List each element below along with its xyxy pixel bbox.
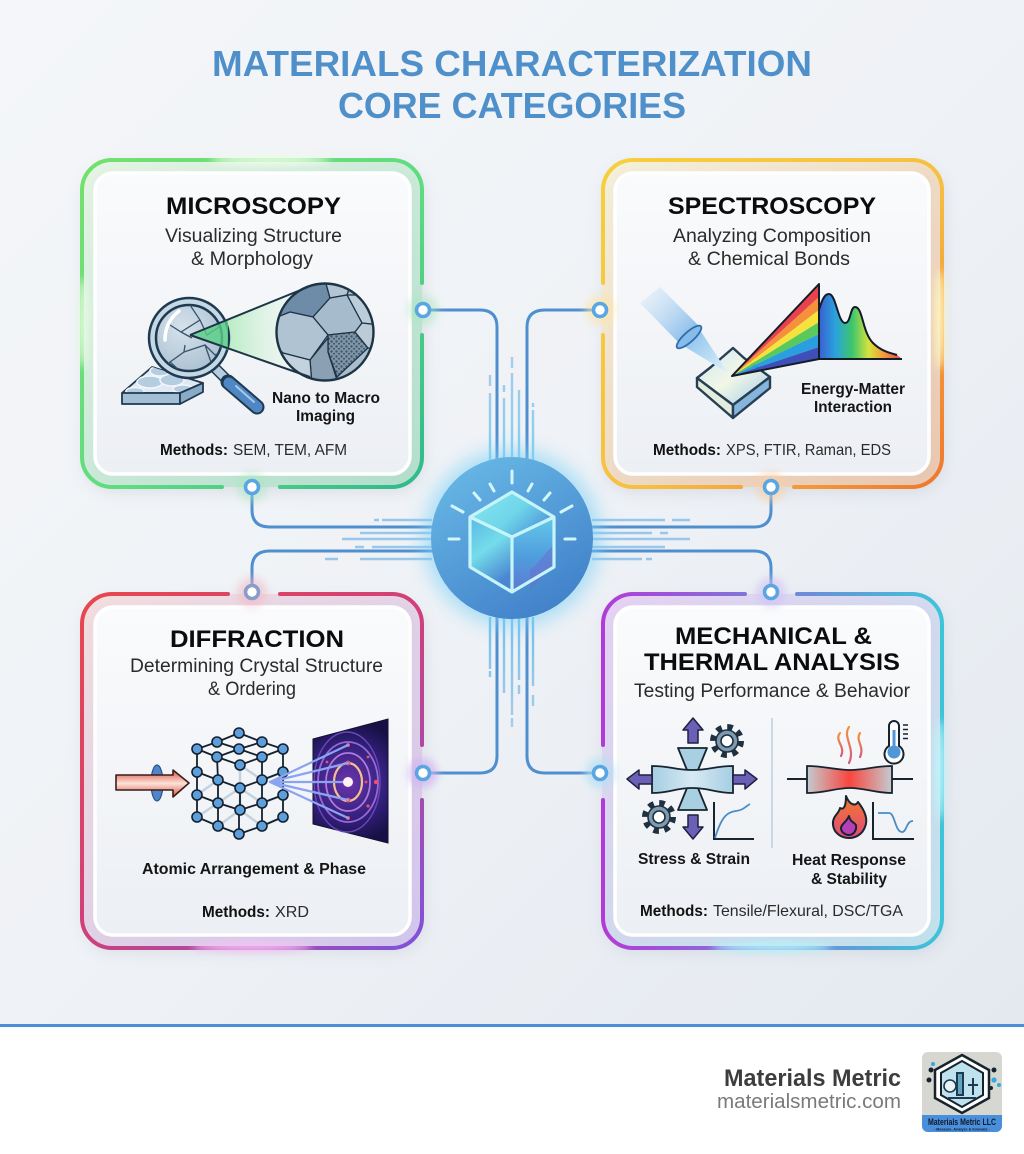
label: heat response and stability (792, 852, 906, 888)
divider (771, 718, 773, 848)
panel: diffraction (82, 594, 422, 952)
icon: gear top (714, 728, 740, 754)
chart: stress strain curve (714, 802, 754, 839)
chart: thermal curve (873, 802, 914, 839)
label: energy-matter interaction: Interaction (814, 399, 892, 416)
spectroscopy methods: Methods: (653, 442, 721, 459)
microscopy frame (78, 155, 422, 487)
title: CORE CATEGORIES (338, 85, 686, 126)
icon: gear bottom (646, 804, 672, 830)
icon: cube (470, 492, 554, 592)
mechanical subtitle: Testing Performance & Behavior (634, 681, 911, 702)
icon: incident beam probe (640, 287, 728, 373)
label: nano to macro imaging: Imaging (296, 408, 355, 425)
brand name and url (717, 1065, 901, 1113)
mechanical frame (602, 594, 945, 952)
central hub: material cube (424, 450, 600, 626)
title: MATERIALS CHARACTERIZATION (212, 43, 812, 84)
icon: sample block (697, 348, 770, 418)
microscopy methods: SEM, TEM, AFM (233, 442, 347, 459)
icon: flame (833, 796, 866, 838)
mechanical methods: Methods: (640, 903, 708, 920)
diffraction subtitle: & Ordering (208, 679, 296, 700)
label: energy-matter interaction: Energy-Matter (801, 381, 905, 398)
icon: magnifying glass (149, 298, 257, 407)
icon: material sample slab (122, 366, 203, 404)
label: energy-matter interaction (801, 381, 905, 416)
diffraction heading: DIFFRACTION (170, 626, 344, 653)
diffraction methods (202, 904, 309, 921)
title (212, 43, 812, 126)
mechanical heading (644, 623, 900, 676)
mechanical methods: Tensile/Flexural, DSC/TGA (713, 903, 903, 920)
mechanical heading: MECHANICAL & (675, 623, 872, 650)
icon: heat waves (838, 727, 861, 763)
panel: spectroscopy (602, 160, 945, 487)
microscopy methods (160, 442, 347, 459)
diffraction methods: XRD (275, 904, 309, 921)
logo (922, 1052, 1002, 1132)
logo: - Measure, Analyze & Innovate - (934, 1128, 991, 1132)
microscopy methods: Methods: (160, 442, 228, 459)
diffraction frame (82, 594, 422, 952)
icon: light cone to magnified view (190, 287, 310, 377)
spectroscopy methods: XPS, FTIR, Raman, EDS (726, 442, 891, 459)
microscopy heading: MICROSCOPY (166, 193, 341, 220)
spectroscopy subtitle: & Chemical Bonds (688, 249, 850, 270)
microscopy subtitle: Visualizing Structure (165, 226, 342, 247)
footer band (0, 1024, 1024, 1154)
brand name and url: materialsmetric.com (717, 1091, 901, 1113)
panel shadows (84, 166, 944, 952)
icon: spectrum curve (819, 284, 902, 359)
spectroscopy frame (602, 160, 945, 487)
icon: detector screen with diffraction rings (270, 719, 388, 843)
label: atomic arrangement and phase: Atomic Arrangement & Phase (142, 861, 366, 878)
diffraction methods: Methods: (202, 904, 270, 921)
label: nano to macro imaging (272, 390, 380, 425)
brand name and url: Materials Metric (724, 1065, 901, 1092)
panel: mechanical and thermal analysis (602, 594, 945, 952)
spectroscopy methods (653, 442, 891, 459)
spectroscopy subtitle (673, 226, 871, 270)
logo: Materials Metric LLC (928, 1117, 996, 1127)
icon: cube light rays (449, 471, 575, 539)
icon: magnified grain circle (190, 280, 385, 385)
mechanical heading: THERMAL ANALYSIS (644, 649, 900, 676)
diffraction subtitle (130, 656, 383, 700)
label: heat response and stability: Heat Response (792, 852, 906, 869)
label: heat response and stability: & Stability (811, 871, 887, 888)
icon: stress specimen with arrows (627, 718, 757, 839)
icon: rainbow dispersion (732, 284, 819, 376)
connector nodes (237, 295, 786, 788)
panel: microscopy (78, 155, 422, 487)
icon: heated specimen (787, 766, 913, 793)
icon: crystal lattice (192, 728, 288, 839)
connector lines (252, 310, 771, 773)
label: stress and strain: Stress & Strain (638, 851, 750, 868)
label: nano to macro imaging: Nano to Macro (272, 390, 380, 407)
microscopy subtitle: & Morphology (191, 249, 314, 270)
diffraction subtitle: Determining Crystal Structure (130, 656, 383, 677)
microscopy subtitle (165, 226, 342, 270)
icon: thermometer (884, 721, 908, 764)
spectroscopy subtitle: Analyzing Composition (673, 226, 871, 247)
icon: incident x-ray arrow (116, 765, 189, 801)
spectroscopy heading: SPECTROSCOPY (668, 193, 876, 220)
